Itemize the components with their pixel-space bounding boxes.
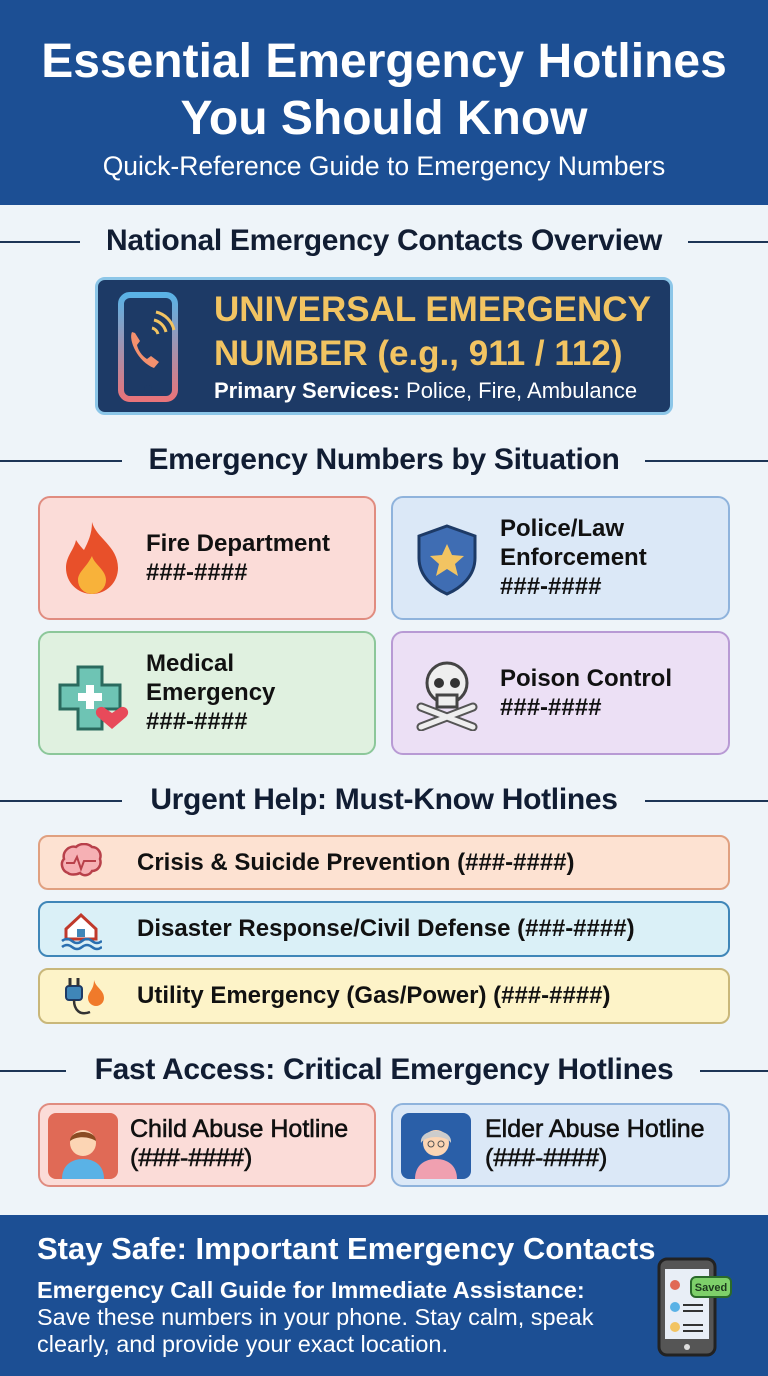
- title: You Should Know: [180, 92, 588, 145]
- icon: phone: [118, 292, 178, 402]
- card: poison: ###-####: [500, 694, 601, 721]
- footer text: [37, 1277, 594, 1357]
- card: fire: [38, 496, 376, 620]
- card: child abuse: (###-####): [130, 1144, 252, 1172]
- heading: urgent help: Urgent Help: Must-Know Hotlines: [150, 783, 618, 816]
- text: universal number: NUMBER (e.g., 911 / 112): [214, 334, 622, 373]
- icon: badge: [418, 524, 476, 596]
- card: police: ###-####: [500, 573, 601, 600]
- card: medical: Medical: [146, 650, 234, 677]
- text: universal number: UNIVERSAL EMERGENCY: [214, 290, 651, 329]
- icon: house flood: [61, 913, 102, 950]
- icon: phone contacts saved: Saved: [695, 1282, 727, 1294]
- icon: plug and flame: [65, 978, 104, 1014]
- heading: national overview: National Emergency Contacts Overview: [106, 224, 662, 257]
- card: medical: ###-####: [146, 708, 247, 735]
- header: [0, 0, 768, 205]
- card: medical: Emergency: [146, 679, 275, 706]
- bar: crisis: Crisis & Suicide Prevention (###-####): [137, 849, 575, 876]
- card: fire: ###-####: [146, 559, 247, 586]
- icon: flame: [66, 522, 118, 594]
- footer text: Save these numbers in your phone. Stay calm, speak clearly, and provide your exact location.: [37, 1304, 593, 1357]
- icon: brain: [60, 843, 102, 876]
- bar: disaster: [38, 901, 730, 957]
- footer title: Stay Safe: Important Emergency Contacts: [37, 1231, 655, 1266]
- card: elder abuse: (###-####): [485, 1144, 607, 1172]
- card: police: Enforcement: [500, 544, 647, 571]
- card: medical: [38, 631, 376, 755]
- icon: phone contacts saved: [658, 1258, 732, 1356]
- title: Essential Emergency Hotlines: [41, 35, 727, 88]
- heading: by situation: Emergency Numbers by Situation: [148, 443, 620, 476]
- card: police: Police/Law: [500, 515, 624, 542]
- footer: [0, 1215, 768, 1376]
- card: poison: Poison Control: [500, 665, 672, 692]
- bar: utility: Utility Emergency (Gas/Power) (###-####): [137, 982, 611, 1009]
- icon: skull: [416, 662, 478, 731]
- bar: crisis: [38, 835, 730, 890]
- card: police: [391, 496, 730, 620]
- card: fire: Fire Department: [146, 530, 330, 557]
- card: child abuse: Child Abuse Hotline: [130, 1115, 348, 1143]
- icon: medical cross: [58, 666, 128, 730]
- subtitle: Quick-Reference Guide to Emergency Numbers: [103, 151, 665, 181]
- panel: universal emergency number: [95, 277, 673, 415]
- card: child abuse: [38, 1103, 376, 1187]
- card: elder abuse: Elder Abuse Hotline: [485, 1115, 705, 1143]
- heading: fast access: Fast Access: Critical Emergency Hotlines: [95, 1053, 673, 1086]
- text: universal number: [214, 290, 651, 373]
- icon: child: [48, 1113, 118, 1179]
- bar: disaster: Disaster Response/Civil Defense (###-####): [137, 915, 635, 942]
- text: primary services: Primary Services: Police, Fire, Ambulance: [214, 378, 637, 403]
- title: [41, 35, 727, 145]
- card: elder abuse: [391, 1103, 730, 1187]
- card: poison: [391, 631, 730, 755]
- icon: elder: [401, 1113, 471, 1179]
- bar: utility: [38, 968, 730, 1024]
- footer text: Emergency Call Guide for Immediate Assistance:: [37, 1277, 585, 1303]
